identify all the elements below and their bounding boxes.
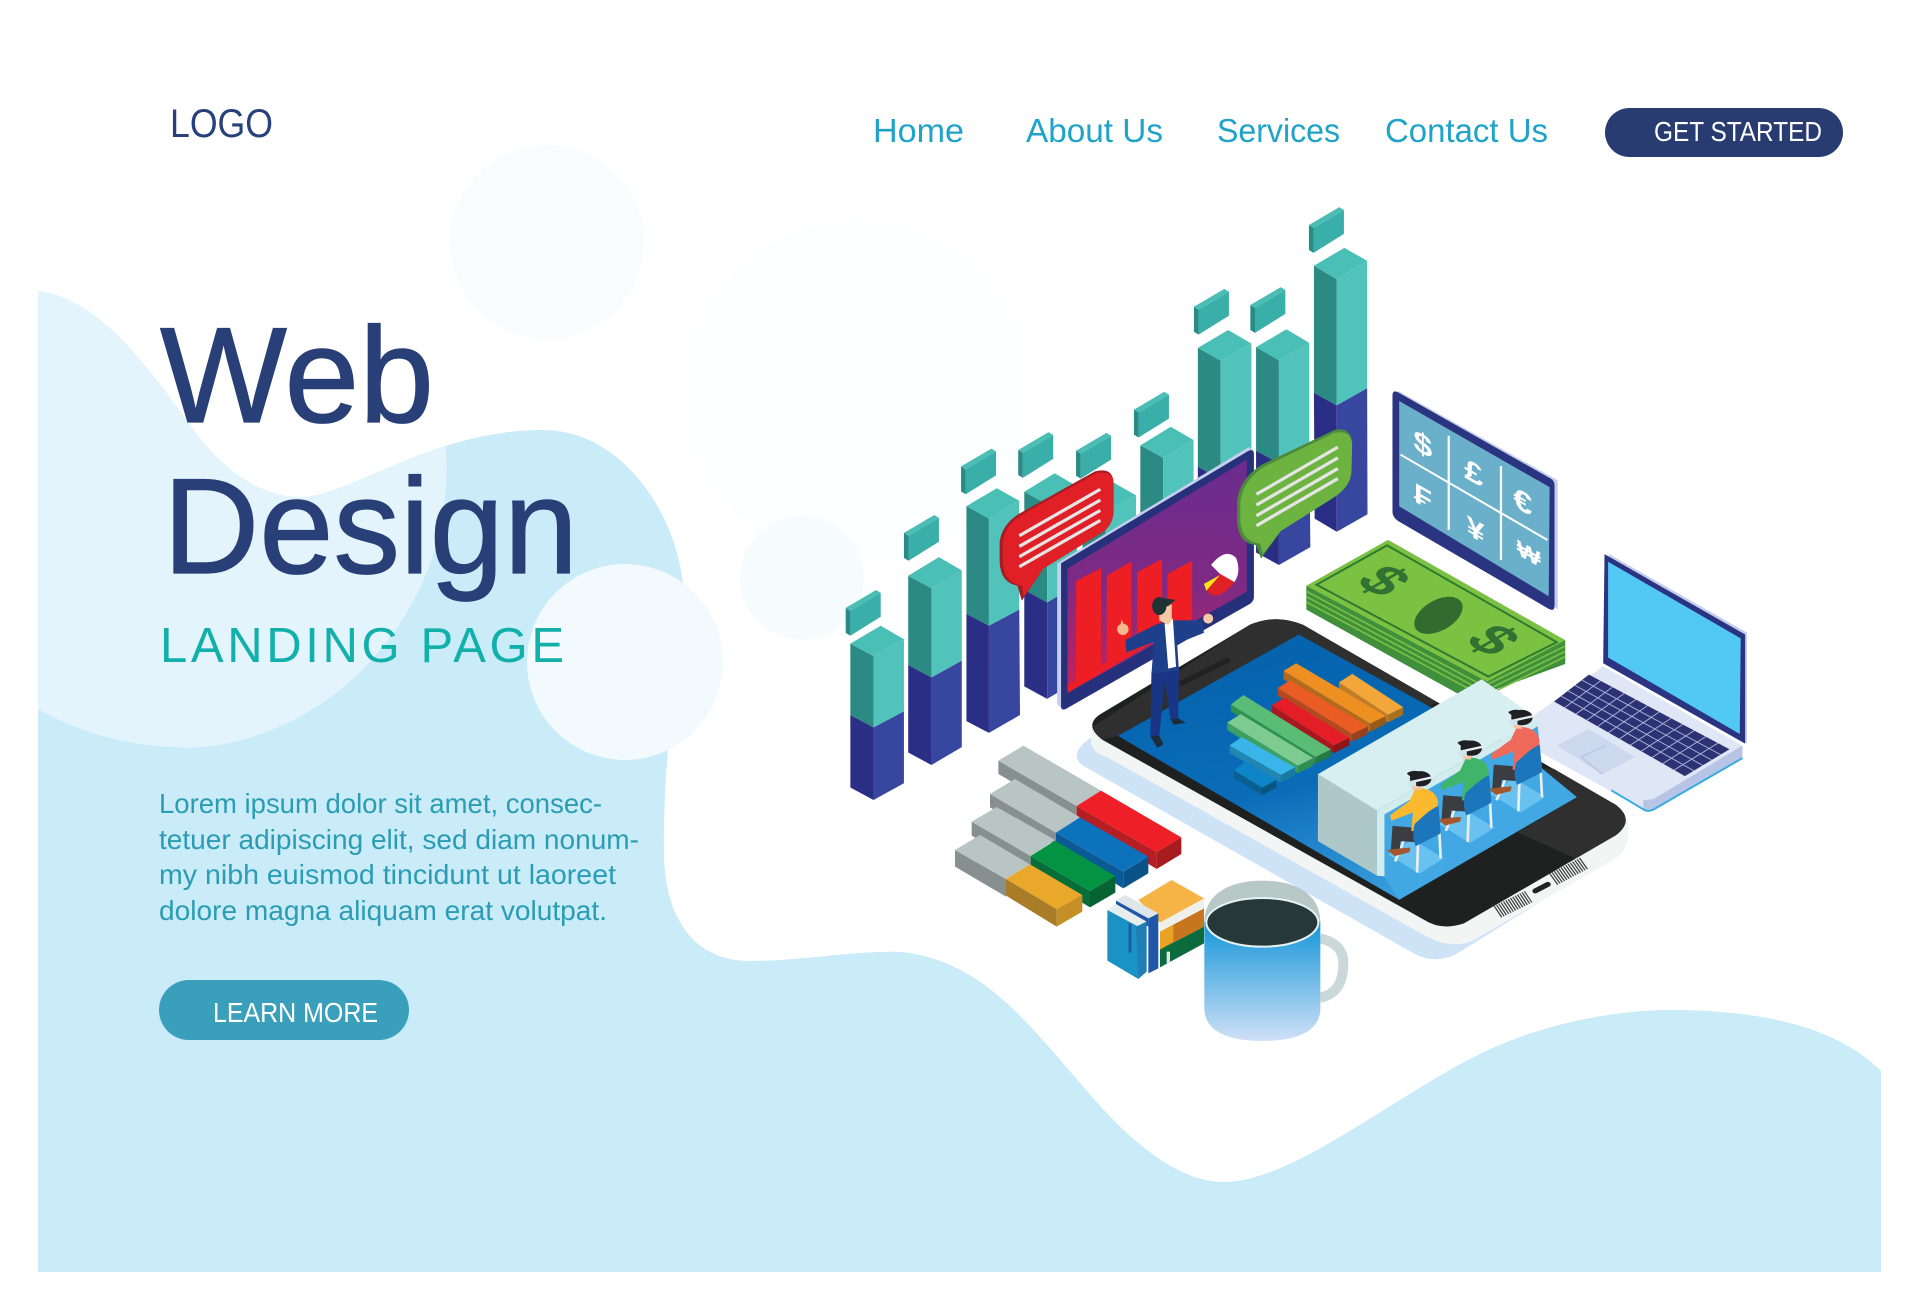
navigation menu xyxy=(873,112,1548,149)
paragraph xyxy=(159,788,639,926)
speaker grille left xyxy=(1497,897,1529,912)
coffee mug xyxy=(1204,881,1343,1041)
background: small circle xyxy=(740,516,864,640)
coffee surface xyxy=(1206,898,1318,947)
block row: blue xyxy=(990,779,1148,888)
currency symbols: ₩ xyxy=(1517,536,1540,573)
background: light blue wave xyxy=(38,291,1881,1272)
block row: red xyxy=(998,746,1181,869)
phone drop shadow xyxy=(1077,736,1613,959)
paragraph: tetuer adipiscing elit, sed diam nonum- xyxy=(159,824,639,855)
screen bars xyxy=(1067,559,1192,693)
person: red shirt xyxy=(1488,710,1545,812)
background: faint large circle xyxy=(685,220,1029,564)
title: web design: Web xyxy=(160,299,434,451)
subtitle: landing page: LANDING PAGE xyxy=(160,619,564,673)
books xyxy=(1107,880,1204,979)
bar 2 xyxy=(904,515,962,765)
currency symbols: ¥ xyxy=(1467,509,1484,550)
block light green xyxy=(1227,714,1313,773)
phone white body xyxy=(1091,726,1628,944)
phone slot xyxy=(1182,660,1227,683)
speaker grille right xyxy=(1553,863,1584,879)
isometric bar chart xyxy=(846,207,1367,800)
currency symbols: $ xyxy=(1413,423,1432,466)
table xyxy=(1318,679,1538,876)
phone bezel highlights xyxy=(1093,619,1626,858)
title: web design xyxy=(160,299,578,602)
block light orange xyxy=(1339,674,1403,723)
laptop xyxy=(1508,554,1747,811)
block row: green xyxy=(972,807,1115,907)
block row: yellow xyxy=(955,835,1082,927)
bar 5 xyxy=(1076,433,1136,654)
phone chart blocks xyxy=(1227,663,1403,795)
dollar signs xyxy=(1342,557,1535,664)
background: circle by the headline xyxy=(527,564,723,760)
currency symbols xyxy=(1413,423,1540,573)
laptop keyboard xyxy=(1554,675,1730,776)
block orange red xyxy=(1278,680,1368,742)
nav: about us: About Us xyxy=(1026,112,1163,149)
block orange xyxy=(1284,663,1386,732)
currency symbols: £ xyxy=(1464,452,1483,495)
floor patch xyxy=(1384,724,1577,900)
button: learn more xyxy=(159,980,409,1040)
nav: contact us: Contact Us xyxy=(1385,112,1548,149)
table with three seated people xyxy=(1318,679,1577,900)
button: learn more: LEARN MORE xyxy=(213,997,378,1028)
mug handle xyxy=(1320,938,1343,998)
bar 1 xyxy=(846,590,904,800)
dollar signs: $ xyxy=(1342,557,1425,605)
green speech bubble xyxy=(1237,429,1352,559)
phone black bezel xyxy=(1092,619,1626,926)
charging port xyxy=(1535,884,1548,891)
title: web design: Design xyxy=(163,450,578,602)
paragraph: my nibh euismod tincidunt ut laoreet xyxy=(159,859,616,890)
block green xyxy=(1231,695,1331,764)
laptop base xyxy=(1508,666,1742,811)
nav: home: Home xyxy=(873,112,964,149)
nav: services: Services xyxy=(1217,112,1340,149)
presentation screen xyxy=(1057,447,1254,710)
phone screen xyxy=(1118,634,1577,900)
bar 3 xyxy=(961,449,1020,733)
block sky blue xyxy=(1230,737,1295,783)
block blue xyxy=(1234,761,1276,795)
bar 6 xyxy=(1134,392,1194,583)
phone xyxy=(1091,619,1628,944)
laptop touchpad xyxy=(1557,729,1635,774)
currency panel xyxy=(1392,391,1558,610)
laptop lid xyxy=(1603,554,1747,744)
background: top circle xyxy=(450,145,644,339)
bar 7 xyxy=(1194,289,1251,547)
mug back wall xyxy=(1204,881,1320,923)
presenter figure xyxy=(1117,597,1213,748)
currency symbols: € xyxy=(1513,481,1532,524)
stair bar blocks xyxy=(955,746,1181,927)
button: get started xyxy=(1605,108,1843,157)
person: yellow shirt xyxy=(1387,771,1444,874)
paragraph: dolore magna aliquam erat volutpat. xyxy=(159,895,607,926)
background: pale overlay blob xyxy=(38,280,449,748)
red speech bubble xyxy=(1000,470,1114,601)
mug body xyxy=(1204,922,1320,1041)
money stack xyxy=(1306,540,1565,700)
bar 8 xyxy=(1250,287,1310,565)
button: get started: GET STARTED xyxy=(1654,116,1822,147)
dollar signs: $ xyxy=(1451,616,1535,664)
currency symbols: ₣ xyxy=(1414,476,1432,517)
logo: LOGO xyxy=(170,102,273,146)
person: green shirt xyxy=(1438,740,1494,843)
bar 9 xyxy=(1309,207,1367,532)
bar 4 xyxy=(1018,432,1077,699)
block red xyxy=(1272,698,1349,753)
screen pie chart xyxy=(1204,554,1238,596)
paragraph: Lorem ipsum dolor sit amet, consec- xyxy=(159,788,602,819)
